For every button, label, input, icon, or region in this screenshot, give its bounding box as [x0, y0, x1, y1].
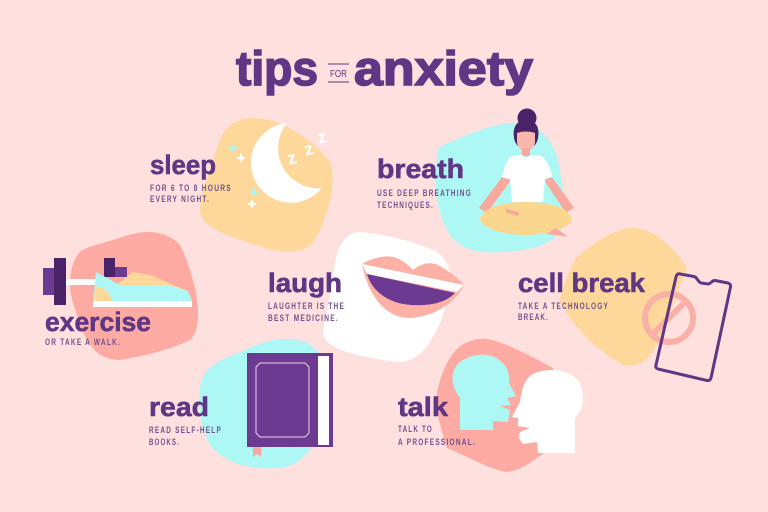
read blob — [199, 339, 325, 468]
laugh heading: laugh — [268, 268, 342, 298]
panel: sleep — [150, 118, 333, 252]
talk description — [398, 424, 476, 448]
sleep description — [150, 183, 232, 205]
icon: zzz — [285, 126, 329, 169]
panel: read — [149, 339, 333, 468]
laugh blob — [323, 232, 450, 362]
icon: dumbbell — [43, 258, 127, 305]
talk blob — [437, 339, 560, 472]
panel: cell break — [518, 228, 731, 381]
talk heading: talk — [398, 392, 449, 422]
icon: cyan head — [452, 355, 516, 430]
panel: talk — [398, 339, 583, 472]
icon: white head — [512, 370, 583, 453]
talk description: TALK TO — [398, 424, 433, 435]
icon: lips — [362, 256, 464, 318]
panel: laugh — [268, 232, 464, 362]
icon: sparkles — [228, 143, 259, 209]
sleep blob — [200, 118, 333, 252]
icon: zzz: z — [285, 147, 299, 169]
cell break heading: cell break — [518, 268, 646, 298]
icon: book — [247, 353, 333, 457]
icon: zzz: z — [302, 138, 316, 160]
exercise blob — [70, 232, 198, 360]
cell break blob — [560, 228, 687, 366]
title — [236, 43, 533, 96]
breath heading: breath — [377, 154, 464, 184]
panel: exercise — [43, 232, 198, 360]
sleep heading: sleep — [150, 150, 216, 180]
laugh description: BEST MEDICINE. — [268, 313, 339, 324]
icon: moon — [251, 123, 322, 203]
laugh description: LAUGHTER IS THE — [268, 301, 345, 312]
breath blob — [436, 123, 564, 252]
title: tips — [236, 43, 318, 96]
sleep description: FOR 6 TO 8 HOURS — [150, 183, 232, 194]
breath description — [377, 188, 472, 211]
breath description: TECHNIQUES. — [377, 200, 434, 211]
title: FOR — [330, 68, 347, 80]
cell break description: TAKE A TECHNOLOGY — [518, 301, 609, 312]
exercise heading: exercise — [45, 307, 151, 337]
exercise description: OR TAKE A WALK. — [45, 337, 121, 348]
laugh description — [268, 301, 345, 324]
read description: BOOKS. — [149, 437, 180, 448]
sleep description: EVERY NIGHT. — [150, 194, 210, 205]
talk description: A PROFESSIONAL. — [398, 437, 476, 448]
icon: zzz: z — [315, 126, 329, 148]
cell break description: BREAK. — [518, 312, 549, 323]
icon: meditating person — [479, 108, 574, 237]
read description — [149, 425, 222, 448]
read description: READ SELF-HELP — [149, 425, 222, 436]
panel: breath — [377, 108, 574, 252]
icon: no sign — [645, 294, 693, 342]
read heading: read — [149, 392, 209, 422]
breath description: USE DEEP BREATHING — [377, 188, 472, 199]
cell break description — [518, 301, 609, 323]
title: anxiety — [354, 43, 533, 96]
icon: phone — [656, 274, 731, 381]
icon: shoe — [93, 272, 192, 307]
